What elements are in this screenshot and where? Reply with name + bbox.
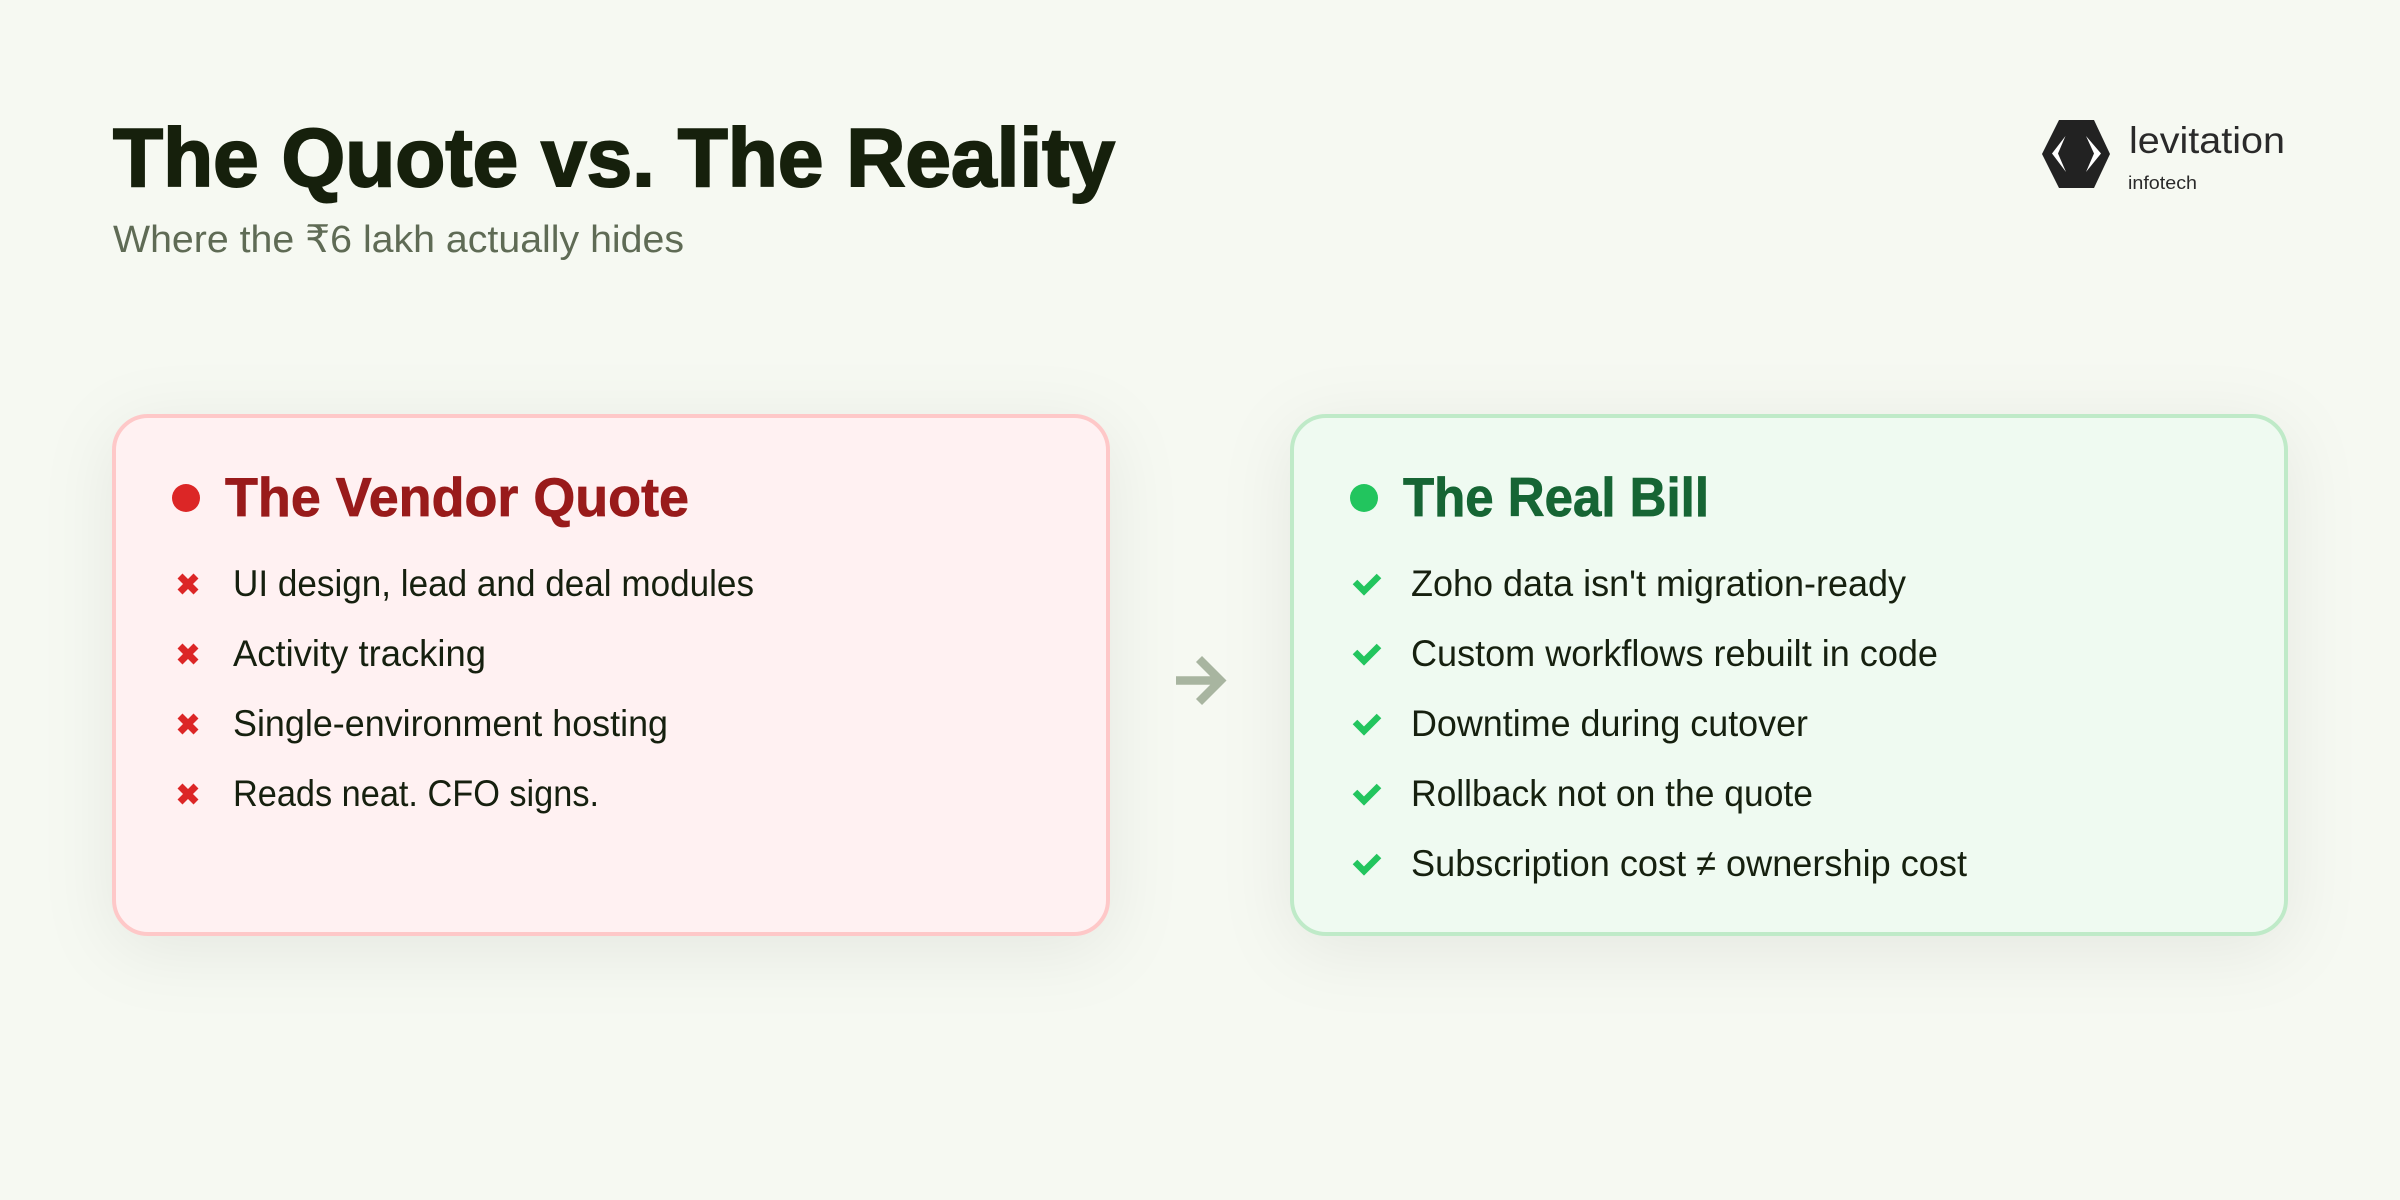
item 1: UI design, lead and deal modules xyxy=(233,562,754,604)
card background xyxy=(1292,416,2286,934)
item 1: Zoho data isn't migration-ready xyxy=(1411,562,1906,604)
list: quote items xyxy=(180,562,754,814)
list: real bill items xyxy=(1355,562,1968,884)
arrow xyxy=(1176,659,1220,702)
icon: red dot xyxy=(172,484,200,512)
panel: the vendor quote xyxy=(114,416,1108,934)
panel: the real bill xyxy=(1292,416,2286,934)
panel heading: The Vendor Quote xyxy=(225,466,689,528)
logo sub-wordmark: infotech xyxy=(2128,173,2197,193)
item 5: Subscription cost ≠ ownership cost xyxy=(1411,842,1968,884)
title: The Quote vs. The Reality xyxy=(113,111,1115,204)
card background xyxy=(114,416,1108,934)
item 2: Custom workflows rebuilt in code xyxy=(1411,632,1938,674)
icon: green dot xyxy=(1350,484,1378,512)
logo wordmark: levitation xyxy=(2129,120,2285,161)
item 3: Single-environment hosting xyxy=(233,702,668,744)
item 4: Rollback not on the quote xyxy=(1411,772,1813,814)
item 2: Activity tracking xyxy=(233,632,486,674)
icon: hexagon logo mark xyxy=(2042,120,2110,188)
subtitle: Where the ₹6 lakh actually hides xyxy=(113,219,684,261)
panel heading: The Real Bill xyxy=(1403,466,1709,528)
item 3: Downtime during cutover xyxy=(1411,702,1808,744)
logo: levitation infotech xyxy=(2042,120,2285,193)
item 4: Reads neat. CFO signs. xyxy=(233,772,599,814)
